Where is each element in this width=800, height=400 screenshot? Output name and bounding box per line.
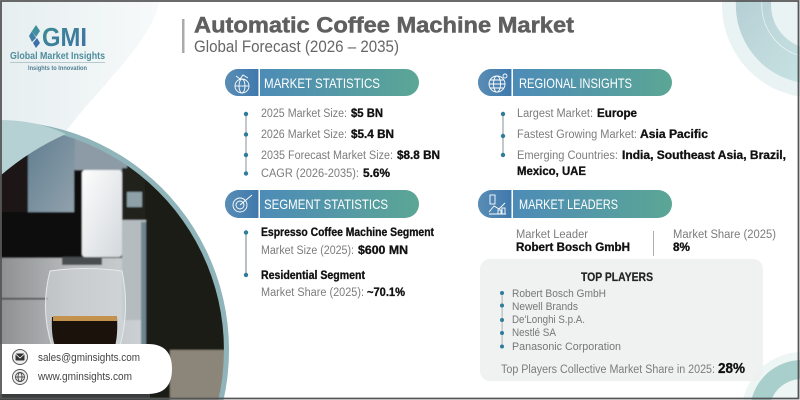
logo name: Global Market Insights: [10, 50, 105, 62]
player list: Nestlé SA: [512, 327, 557, 339]
fastest growing market: [517, 129, 709, 141]
title: Automatic Coffee Machine Market: [194, 12, 575, 38]
emerging countries: India, Southeast Asia, Brazil,: [622, 150, 786, 162]
market share: [673, 229, 776, 254]
panel: market statistics: [225, 69, 440, 180]
logo letters: GMI: [42, 22, 87, 52]
icon: logo diamonds: [29, 25, 40, 48]
market leader: [516, 229, 630, 254]
logo: [10, 22, 105, 72]
emerging countries: Mexico, UAE: [517, 166, 586, 178]
collective share: 28%: [718, 361, 745, 377]
heading pill: [478, 69, 672, 96]
player list: [512, 288, 621, 353]
icon: email: [12, 350, 28, 364]
contact pill: [0, 344, 172, 394]
segment: residential: Residential Segment: [261, 270, 365, 282]
stat: 2026 market size: $5.4 BN: [351, 129, 394, 141]
collective share: Top Players Collective Market Share in 2025:: [501, 364, 715, 376]
segment: espresso: Market Size (2025):: [261, 245, 354, 257]
stat: 2035 forecast: $8.8 BN: [397, 150, 440, 162]
subtitle: Global Forecast (2026 – 2035): [194, 38, 399, 56]
stat: 2025 market size: 2025 Market Size:: [261, 108, 347, 120]
top players heading: TOP PLAYERS: [581, 272, 653, 284]
panel: segment statistics: [225, 190, 434, 299]
photo of coffee machine: [0, 120, 229, 400]
player list: De'Longhi S.p.A.: [512, 314, 585, 326]
emerging countries: Emerging Countries:: [517, 150, 618, 162]
stat: 2025 market size: $5 BN: [351, 108, 383, 120]
top right decorative arcs: [722, 0, 800, 97]
segment: residential: ~70.1%: [367, 287, 405, 299]
player list: Panasonic Corporation: [512, 341, 621, 353]
players timeline: [500, 291, 504, 348]
decorative pale shape behind logo: [0, 0, 160, 134]
heading pill: [225, 69, 419, 96]
segment: espresso: Espresso Coffee Machine Segment: [261, 227, 434, 239]
segment: residential: [261, 270, 405, 299]
stat: 2026 market size: 2026 Market Size:: [261, 129, 347, 141]
title block: [182, 12, 575, 56]
segment: residential: Market Share (2025):: [261, 287, 364, 299]
website address: www.gminsights.com: [37, 371, 132, 383]
market leader: Market Leader: [516, 229, 588, 241]
segment: espresso: $600 MN: [358, 245, 408, 257]
stat: CAGR: CAGR (2026-2035):: [261, 168, 359, 180]
timeline: [501, 112, 505, 157]
fastest growing market: Fastest Growing Market:: [517, 129, 637, 141]
segment: espresso: [261, 227, 434, 257]
icon: globe with chart: [235, 75, 249, 93]
panel: regional insights: [478, 69, 786, 178]
logo tagline: Insights to Innovation: [28, 66, 87, 72]
heading pill: [478, 190, 672, 218]
email address: sales@gminsights.com: [38, 352, 140, 364]
icon: target chart: [233, 195, 252, 212]
emerging countries: [517, 150, 786, 178]
panel: top players: [480, 259, 763, 381]
stat: 2035 forecast: 2035 Forecast Market Size:: [261, 150, 393, 162]
market share: 8%: [673, 242, 690, 254]
largest market: [517, 108, 637, 120]
stat: 2026 market size: [261, 129, 394, 141]
heading pill: [225, 190, 419, 218]
panel: market leaders: [478, 190, 776, 381]
largest market: Largest Market:: [517, 108, 593, 120]
player list: Newell Brands: [512, 301, 578, 313]
market share: Market Share (2025): [673, 229, 776, 241]
icon: globe: [489, 74, 507, 92]
player list: Robert Bosch GmbH: [512, 288, 606, 300]
icon: web: [12, 370, 28, 384]
top left teal corner shape: [0, 120, 66, 176]
heading pill: SEGMENT STATISTICS: [264, 196, 388, 212]
stat: CAGR: 5.6%: [363, 168, 390, 180]
timeline: [244, 230, 248, 277]
market leader: Robert Bosch GmbH: [516, 242, 630, 254]
coffee glass: [45, 268, 126, 346]
heading pill: MARKET LEADERS: [519, 196, 618, 212]
fastest growing market: Asia Pacific: [640, 129, 709, 141]
heading pill: MARKET STATISTICS: [264, 75, 380, 91]
icon: leaders chart: [489, 195, 506, 214]
timeline: [244, 112, 248, 176]
bottom right decorative arcs: [743, 352, 800, 400]
largest market: Europe: [597, 108, 637, 120]
heading pill: REGIONAL INSIGHTS: [519, 75, 632, 91]
